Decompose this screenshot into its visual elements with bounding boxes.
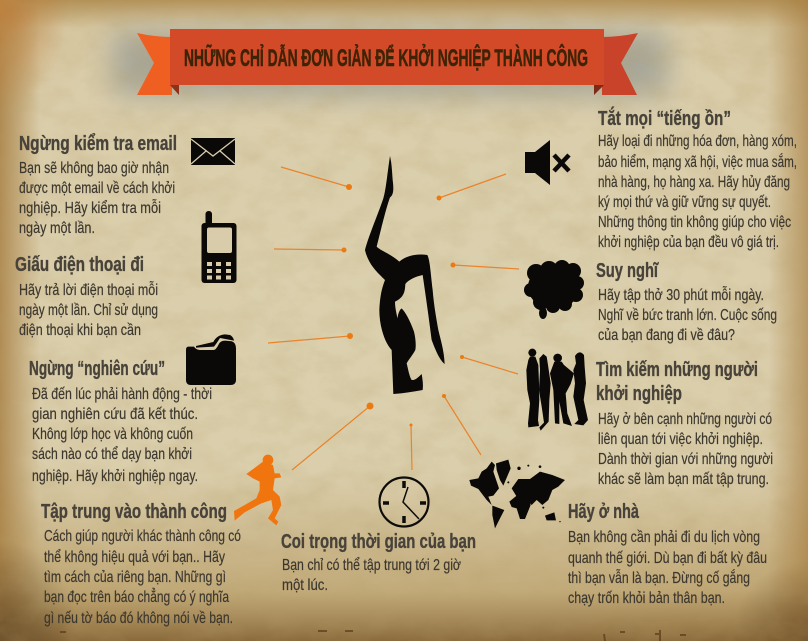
text block: của bạn đang đi về đâu? — [598, 327, 735, 344]
connector: folder — [268, 333, 353, 343]
text block: Không lớp học và không cuốn — [32, 426, 193, 443]
text block — [598, 133, 797, 251]
central acrobat silhouette — [365, 156, 445, 394]
text block: thì bạn vẫn là bạn. Đừng cố gắng — [568, 568, 750, 587]
panel: focus on success — [41, 501, 241, 627]
heading: Suy nghĩ — [596, 260, 659, 282]
text block: nghiệp. Hãy khởi nghiệp ngay. — [32, 468, 198, 485]
connector: phone — [274, 248, 346, 252]
text block: bạn đọc trên báo chẳng có ý nghĩa — [44, 587, 229, 606]
heading: khởi nghiệp — [596, 383, 682, 405]
text block — [598, 411, 773, 488]
text block: chạy trốn khỏi bản thân bạn. — [568, 590, 725, 607]
icon: muted speaker — [525, 140, 569, 185]
banner left fold — [170, 85, 179, 95]
connector: mute — [436, 174, 506, 200]
panel: hide the phone — [15, 254, 158, 339]
icon: running man — [234, 455, 281, 525]
text block: Hãy tập thở 30 phút mỗi ngày. — [598, 285, 764, 304]
heading: Tập trung vào thành công — [41, 501, 227, 523]
text block: Bạn sẽ không bao giờ nhận — [19, 160, 169, 177]
text block: Đã đến lúc phải hành động - thời — [32, 386, 212, 403]
banner right tail — [602, 33, 638, 95]
icon: thought bubble — [524, 260, 584, 319]
text block: Cách giúp người khác thành công có — [44, 528, 241, 545]
connector: clock — [410, 424, 412, 470]
text block: thể không hiệu quả với bạn.. Hãy — [44, 548, 225, 566]
icon: clock — [380, 478, 428, 526]
text block — [568, 529, 767, 607]
text block: sách nào có thể dạy bạn khởi — [32, 445, 192, 463]
text block: nghiệp. Hãy kiểm tra mỗi — [19, 198, 161, 217]
panel: think — [596, 260, 777, 344]
text block: ngày một lần. — [19, 220, 95, 237]
text block: ngày một lần. Chỉ sử dụng — [19, 302, 158, 319]
panel: turn off noise — [598, 106, 797, 251]
text block: gian nghiên cứu đã kết thúc. — [32, 406, 198, 423]
text block — [19, 160, 175, 237]
text block: liên quan tới việc khởi nghiệp. — [598, 431, 763, 448]
icon: envelope — [191, 138, 235, 165]
heading: Tắt mọi “tiếng ồn” — [598, 106, 731, 130]
banner left tail — [137, 33, 172, 95]
text block: Bạn chỉ có thể tập trung tới 2 giờ — [282, 556, 461, 574]
heading: Hãy ở nhà — [568, 501, 640, 523]
text block — [598, 285, 777, 344]
text block — [44, 528, 241, 627]
banner right fold — [594, 85, 604, 95]
panel: value your time — [281, 531, 476, 594]
heading: Giấu điện thoại đi — [15, 254, 144, 276]
text block: một lúc. — [282, 577, 328, 594]
text block — [19, 280, 158, 339]
icon: group of people — [526, 349, 588, 431]
connector: envelope — [281, 167, 352, 190]
heading — [596, 359, 758, 405]
panel: find other founders — [596, 359, 773, 488]
connector: runner — [292, 402, 374, 470]
banner body — [170, 29, 604, 85]
icon: mobile phone — [202, 211, 236, 283]
title banner — [137, 29, 638, 95]
heading: Coi trọng thời gian của bạn — [281, 531, 476, 553]
text block — [32, 386, 212, 485]
panel: stop researching — [29, 358, 212, 485]
connector: thought bubble — [450, 262, 519, 269]
connector: map — [442, 394, 481, 455]
heading: Ngừng “nghiên cứu” — [29, 358, 165, 380]
text block: tìm cách của riêng bạn. Những gì — [44, 569, 226, 586]
icon: folder — [186, 334, 236, 385]
text block — [282, 556, 461, 594]
panel: stop checking email — [19, 133, 177, 237]
text block: điện thoại khi bạn cần — [19, 322, 141, 339]
panel: stay home — [568, 501, 767, 607]
text block: Hãy trả lời điện thoại mỗi — [19, 280, 158, 299]
connector: people — [460, 355, 518, 374]
text block: gì nếu tờ báo đó không nói về bạn. — [44, 610, 233, 627]
icon: world map — [469, 460, 565, 528]
text block: được một email về cách khởi — [19, 180, 175, 197]
heading: Ngừng kiểm tra email — [19, 133, 177, 155]
